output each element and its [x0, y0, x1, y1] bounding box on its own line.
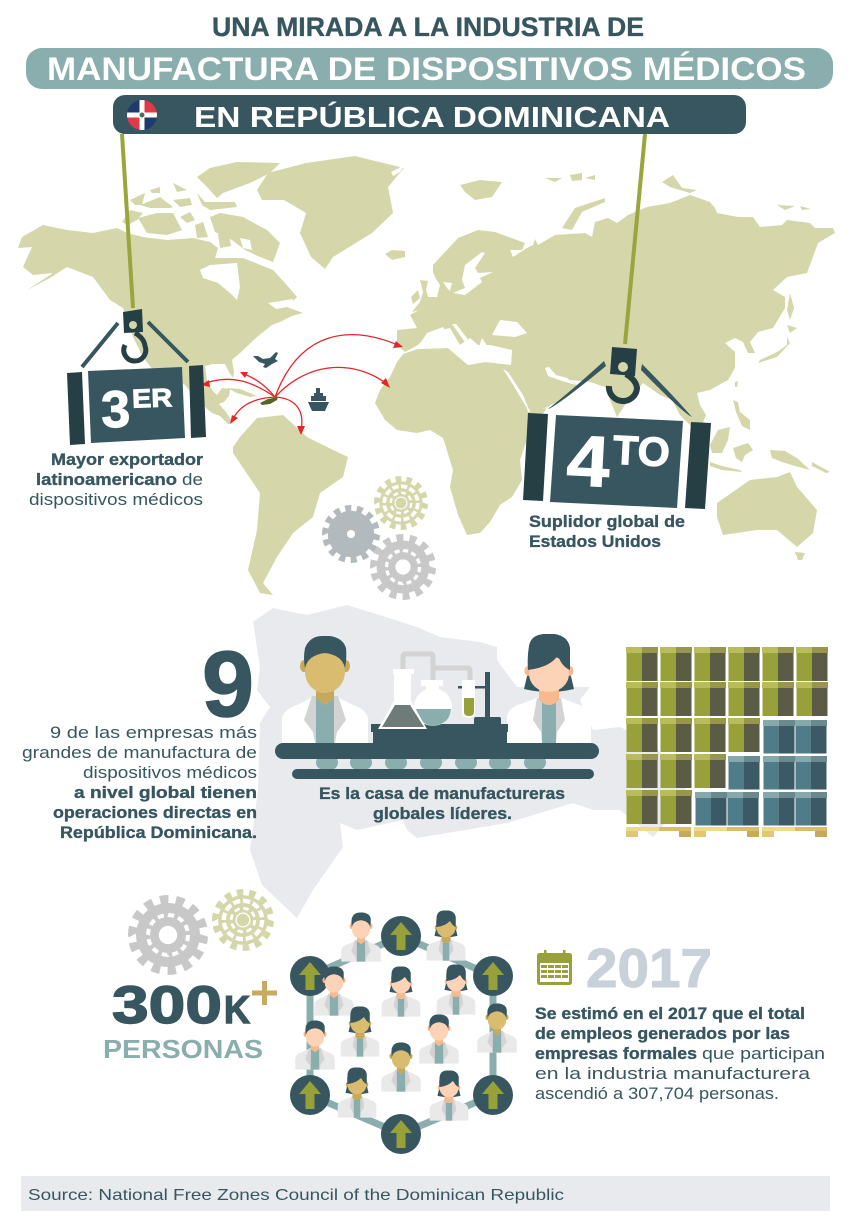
text: mayor exportador [29, 450, 203, 509]
source bar [21, 1176, 830, 1211]
text: casa de manufactureras: Es la casa de manufactureras [319, 785, 565, 803]
world map [18, 156, 835, 595]
gear: large grey [133, 900, 203, 970]
dominican republic marker [260, 397, 278, 405]
text: nine companies: República Dominicana. [60, 824, 257, 842]
text: employment estimate: ascendió a 307,704 personas. [535, 1085, 779, 1103]
hexagon links [310, 936, 493, 1134]
person 7 [295, 1020, 335, 1070]
gear: grey [374, 538, 432, 596]
text: mayor exportador: de [182, 470, 203, 489]
round flask [414, 680, 452, 726]
text: mayor exportador: Mayor exportador [51, 450, 203, 469]
rope: left [122, 134, 133, 308]
crane: 3er [67, 309, 206, 445]
text: nine companies: 9 de las empresas más [50, 724, 257, 742]
text: employment estimate [535, 1005, 825, 1103]
icon: dominican flag [127, 100, 157, 130]
worker: man [282, 636, 368, 743]
text: employment estimate: de empleos generados por las [535, 1025, 790, 1043]
crane: 3er: 3 [100, 380, 131, 439]
text: mayor exportador: latinoamericano [36, 470, 177, 489]
label: personas: PERSONAS [103, 1034, 263, 1064]
text: employment estimate: en la industria manufacturera [535, 1065, 811, 1083]
arrowheads [201, 341, 403, 435]
person 1 [341, 912, 381, 962]
text: nine companies: a nivel global tienen [74, 784, 257, 802]
year: 2017: 2017 [586, 937, 712, 999]
person 10 [381, 1042, 421, 1092]
background map: dominican republic [250, 605, 690, 918]
stat: 300k+ [112, 976, 277, 1035]
lab scene [275, 634, 599, 779]
node: upper left [290, 956, 330, 996]
person 11 [338, 1068, 376, 1118]
people network [290, 911, 517, 1154]
test tube [462, 680, 475, 718]
person 12 [430, 1071, 468, 1121]
rope: right [625, 134, 645, 344]
text: nine companies: dispositivos médicos [83, 764, 257, 782]
number: 9: 9 [202, 632, 254, 736]
source bar: Source: National Free Zones Council of the Dominican Republic [28, 1187, 564, 1204]
text: employment estimate: que participan [702, 1045, 825, 1063]
icon: plane [253, 352, 278, 368]
crane: 4to: 4 [565, 421, 612, 503]
text: employment estimate: empresas formales [535, 1045, 697, 1063]
worker: woman [507, 634, 591, 743]
node: lower right [473, 1075, 513, 1115]
title: una mirada: UNA MIRADA A LA INDUSTRIA DE [212, 12, 644, 42]
person 5 [437, 965, 475, 1015]
conical flask [378, 669, 427, 729]
person 8 [341, 1007, 379, 1057]
node: top [381, 916, 421, 956]
text: nine companies [22, 724, 257, 842]
gear: small olive [216, 893, 270, 947]
text: casa de manufactureras [319, 785, 565, 823]
stat: 300k+: 300 [112, 976, 222, 1035]
text: nine companies: grandes de manufactura de [22, 744, 257, 762]
icon: calendar [537, 950, 572, 985]
person 9 [419, 1014, 459, 1064]
text: mayor exportador: dispositivos médicos [29, 490, 203, 509]
text: casa de manufactureras: globales líderes. [373, 805, 512, 823]
gear: olive [378, 480, 424, 526]
crane: 4to: TO [612, 427, 671, 476]
crane: 3er: ER [132, 382, 173, 414]
person 3 [314, 966, 354, 1016]
gear: blue grey [326, 509, 376, 559]
text: suplidor global: Suplidor global de [529, 512, 685, 531]
map water cut-outs [200, 165, 576, 412]
banner: manufactura de dispositivos médicos: MANUFACTURA DE DISPOSITIVOS MÉDICOS [47, 51, 806, 87]
person 6 [477, 1003, 517, 1053]
glass tubes [403, 654, 470, 680]
node: lower left [290, 1075, 330, 1115]
node: upper right [473, 956, 513, 996]
person 2 [427, 911, 465, 961]
person 4 [382, 967, 420, 1017]
banner: en república dominicana [113, 95, 746, 134]
conveyor belt [275, 672, 599, 779]
export arrows [206, 335, 398, 430]
stat: 300k+: K [224, 989, 250, 1032]
crane: 4to [523, 347, 711, 509]
text: suplidor global [529, 512, 685, 551]
node: bottom [381, 1114, 421, 1154]
pallets with boxes [626, 647, 828, 837]
conveyor rollers [316, 755, 546, 770]
banner: en república dominicana: EN REPÚBLICA DOMINICANA [194, 100, 670, 134]
text: suplidor global: Estados Unidos [529, 532, 661, 551]
text: employment estimate: Se estimó en el 2017 que el total [535, 1005, 805, 1023]
text: nine companies: operaciones directas en [53, 804, 257, 822]
icon: ship [308, 388, 329, 411]
